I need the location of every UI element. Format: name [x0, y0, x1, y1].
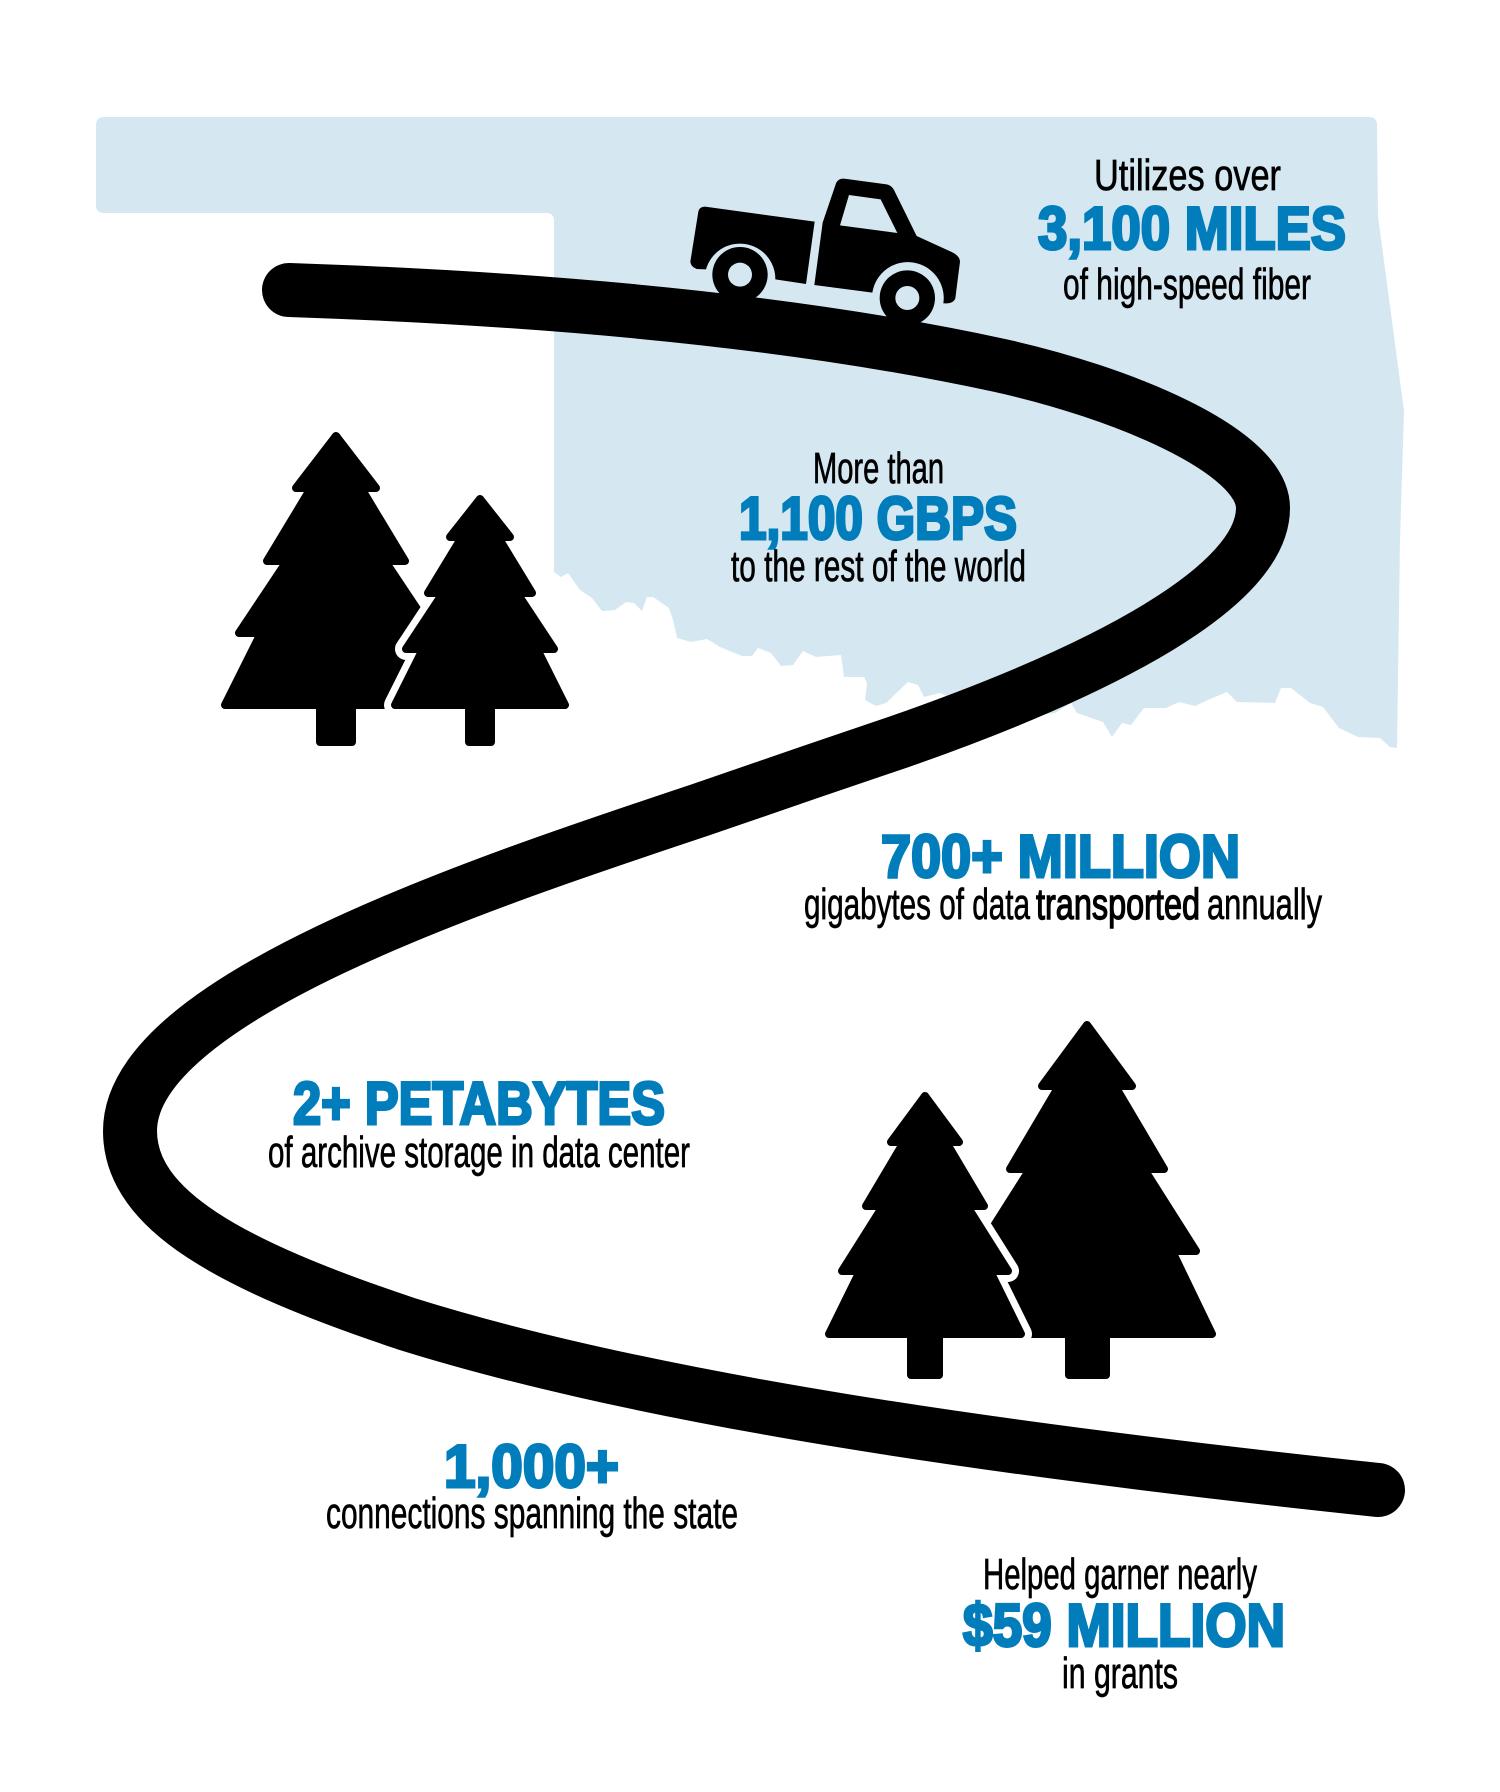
stat: 1,100 Gbps: More than	[813, 444, 944, 493]
icon: upper pine trees	[225, 436, 565, 742]
stat: 1,000+ connections: 1,000+	[444, 1433, 619, 1500]
stat: 2+ petabytes	[268, 1070, 690, 1177]
stat: $59 million in grants: Helped garner nearly	[983, 1550, 1257, 1599]
stat: 700+ million gigabytes: transported	[1036, 880, 1200, 929]
stat: 700+ million gigabytes	[804, 823, 1322, 929]
stat: 2+ petabytes: 2+ PETABYTES	[293, 1070, 665, 1137]
stat: 1,100 Gbps: to the rest of the world	[731, 542, 1026, 591]
stat: 1,100 Gbps	[731, 444, 1026, 591]
stat: 1,000+ connections	[326, 1433, 738, 1538]
map: Oklahoma state silhouette	[96, 117, 1404, 748]
stat: $59 million in grants	[963, 1550, 1285, 1698]
stat: 700+ million gigabytes: 700+ MILLION	[881, 823, 1240, 890]
stat: 3,100 miles of fiber: 3,100 MILES	[1038, 195, 1346, 262]
stat: 700+ million gigabytes: gigabytes of data	[804, 880, 1030, 929]
stat: 3,100 miles of fiber	[1038, 151, 1346, 309]
icon: lower pine trees	[829, 1025, 1212, 1375]
stat: 1,100 Gbps: 1,100 GBPS	[739, 485, 1017, 552]
stat: 2+ petabytes: of archive storage in data center	[268, 1128, 690, 1177]
stat: 1,000+ connections: connections spanning the state	[326, 1489, 738, 1538]
stat: 700+ million gigabytes: annually	[1207, 880, 1322, 929]
stat: $59 million in grants: $59 MILLION	[963, 1592, 1285, 1659]
winding road	[130, 290, 1378, 1490]
stat: $59 million in grants: in grants	[1062, 1649, 1178, 1698]
stat: 3,100 miles of fiber: of high-speed fiber	[1063, 260, 1311, 309]
icon: pickup truck	[690, 179, 960, 326]
stat: 3,100 miles of fiber: Utilizes over	[1094, 151, 1281, 200]
